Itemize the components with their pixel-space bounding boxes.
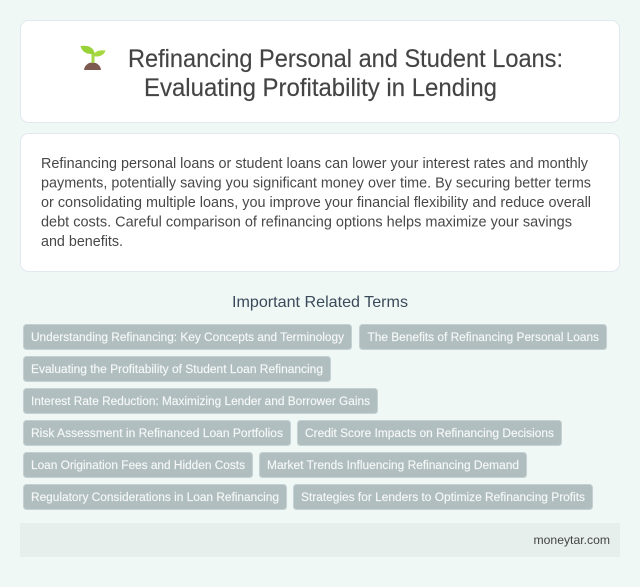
heading: important related terms: Important Related Terms	[232, 294, 408, 311]
tag: regulatory considerations	[24, 484, 286, 510]
tag: understanding refinancing: Understanding Refinancing: Key Concepts and Terminology	[31, 330, 345, 344]
summary paragraph	[41, 156, 591, 250]
tag: benefits of refinancing	[360, 324, 606, 350]
tag: origination fees	[24, 452, 252, 478]
title	[128, 45, 563, 102]
tag list	[24, 324, 606, 510]
icon: seedling	[80, 46, 106, 70]
title: Evaluating Profitability in Lending	[144, 74, 497, 102]
title: Refinancing Personal and Student Loans:	[128, 45, 563, 73]
tag: interest rate reduction: Interest Rate Reduction: Maximizing Lender and Borrower Gains	[31, 394, 370, 408]
tag: understanding refinancing	[24, 324, 352, 350]
footer site name: moneytar.com	[534, 533, 610, 547]
tag: credit score impacts: Credit Score Impacts on Refinancing Decisions	[305, 426, 554, 440]
tag: market trends	[260, 452, 526, 478]
panel: title card	[20, 20, 620, 122]
tag: regulatory considerations: Regulatory Considerations in Loan Refinancing	[31, 490, 279, 504]
tag: benefits of refinancing: The Benefits of Refinancing Personal Loans	[368, 330, 599, 344]
tag: credit score impacts	[298, 420, 562, 446]
tag: student loan profitability: Evaluating the Profitability of Student Loan Refinancing	[31, 362, 323, 376]
summary paragraph: and benefits.	[41, 234, 123, 250]
tag: student loan profitability	[24, 356, 330, 382]
summary paragraph: payments, potentially saving you significant money over time. By securing better terms	[41, 176, 591, 192]
panel: summary text card	[20, 134, 620, 272]
summary paragraph: debt costs. Careful comparison of refinancing options helps maximize your savings	[41, 214, 572, 230]
tag: interest rate reduction	[24, 388, 378, 414]
tag: lender strategies: Strategies for Lenders to Optimize Refinancing Profits	[301, 490, 585, 504]
footer bar	[20, 523, 620, 557]
tag: risk assessment: Risk Assessment in Refinanced Loan Portfolios	[31, 426, 283, 440]
tag: origination fees: Loan Origination Fees and Hidden Costs	[31, 458, 245, 472]
tag: market trends: Market Trends Influencing Refinancing Demand	[267, 458, 519, 472]
summary paragraph: Refinancing personal loans or student loans can lower your interest rates and monthly	[41, 156, 589, 172]
tag: lender strategies	[294, 484, 592, 510]
tag: risk assessment	[24, 420, 290, 446]
summary paragraph: or consolidating multiple loans, you improve your financial flexibility and reduce overall	[41, 195, 591, 211]
